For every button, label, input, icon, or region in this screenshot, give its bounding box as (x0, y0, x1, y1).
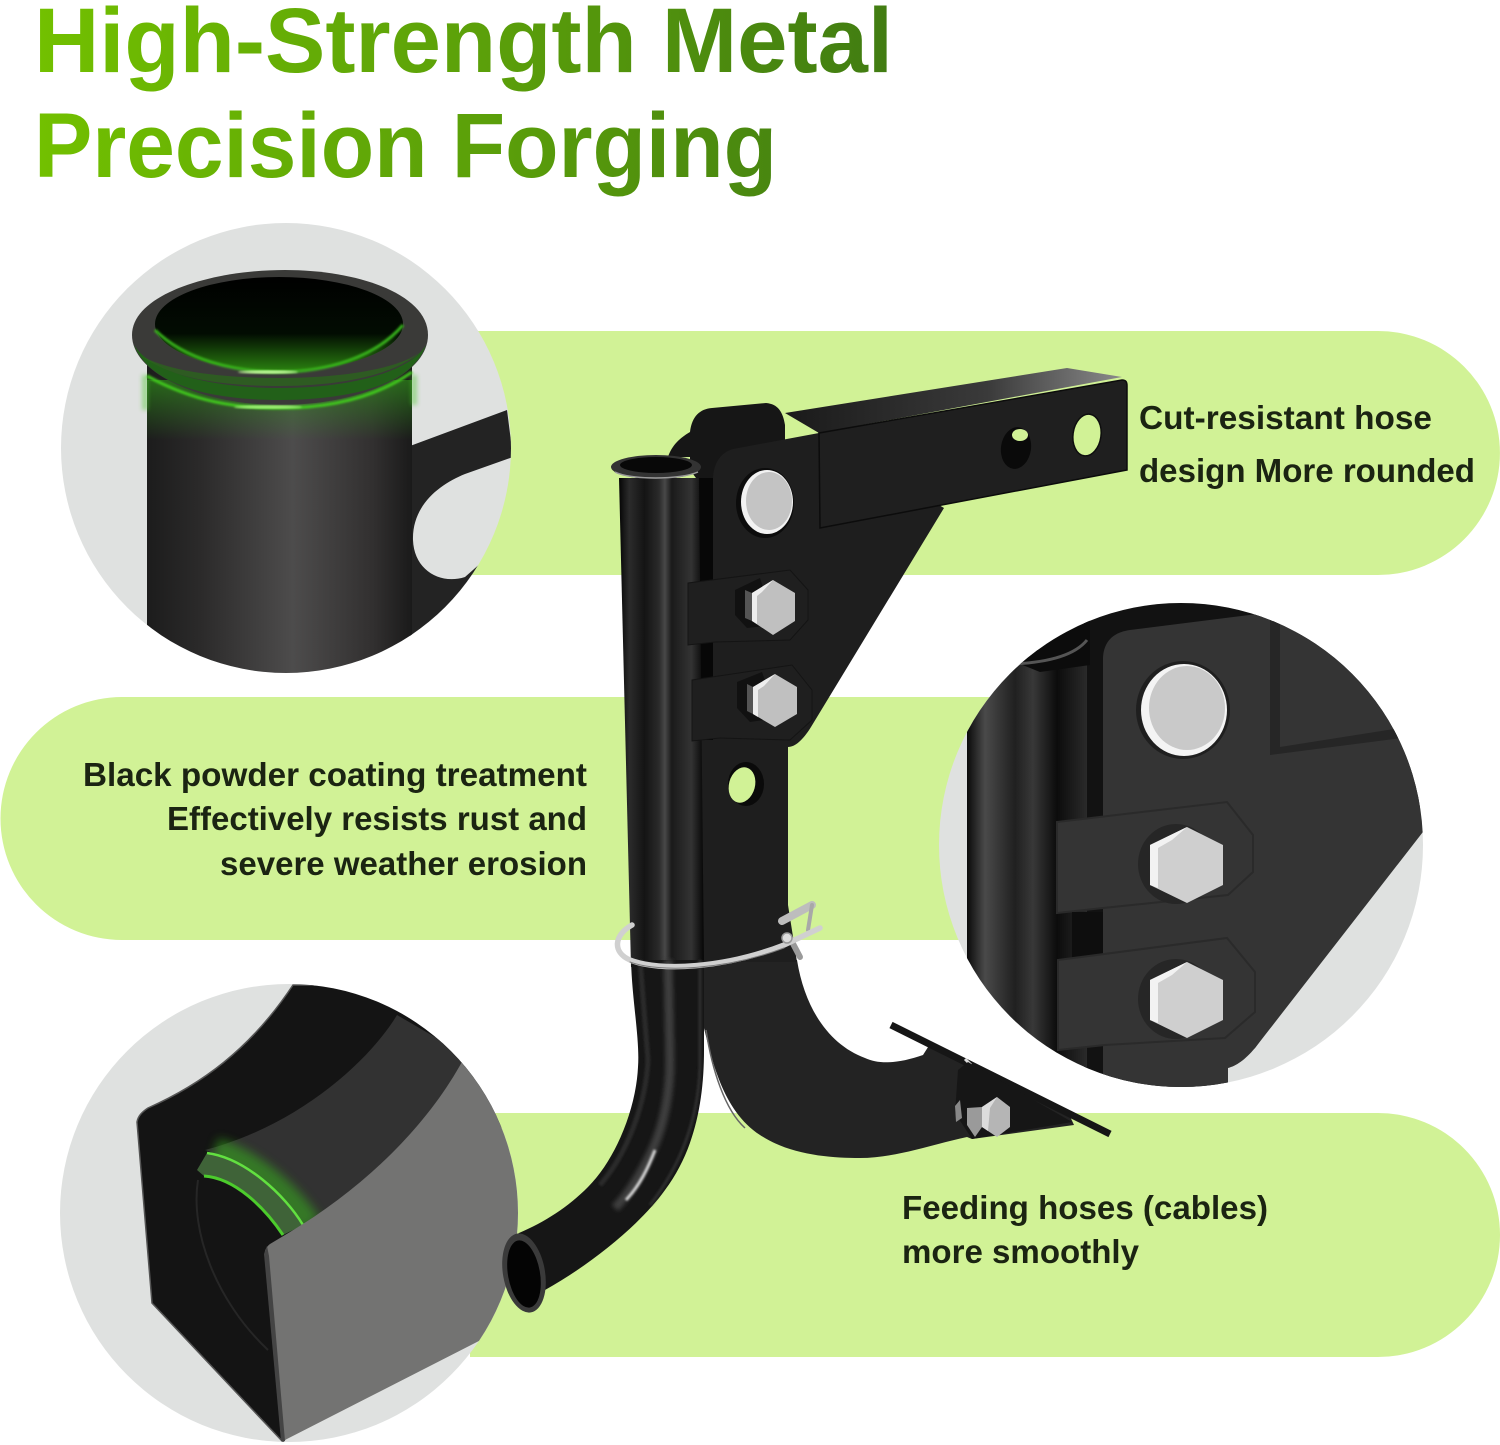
green glow lines (147, 372, 412, 408)
bracket arm behind tube (410, 410, 511, 636)
detail circle: rolled tube rim (61, 223, 520, 680)
tube body (147, 340, 412, 680)
main tube (619, 478, 704, 967)
hook rim light (706, 1030, 745, 1128)
tube rim (611, 455, 701, 479)
tab upper (1057, 802, 1253, 913)
panel: feeding hoses band (470, 1113, 1500, 1357)
tube (967, 650, 1087, 1100)
pivot pin (736, 468, 794, 538)
arm front (819, 380, 1127, 528)
callout: cut-resistant text (1139, 399, 1475, 489)
hollow opening (197, 1180, 268, 1350)
receiver hole near (1070, 412, 1104, 458)
callout: feeding hoses text: more smoothly (902, 1233, 1140, 1270)
green edge glow (215, 1150, 310, 1225)
title: Precision Forging (34, 95, 777, 197)
rim (132, 270, 428, 405)
angled plate on hook (891, 1025, 1110, 1139)
lower tube curve (510, 960, 704, 1290)
callout: powder coating text: Effectively resists rust and (167, 800, 587, 837)
black bracket body (137, 985, 520, 1442)
small hook bolt (955, 1097, 1010, 1137)
plate (1103, 612, 1440, 1090)
strap tab lower (692, 665, 812, 741)
panel: cut-resistant band (470, 331, 1500, 575)
hex bolt upper (735, 578, 795, 635)
callout: powder coating text (83, 756, 587, 882)
tube highlights (600, 960, 700, 1208)
arm edge (1270, 620, 1402, 755)
tube mouth (496, 1230, 552, 1316)
dark backing (1084, 602, 1420, 1090)
mid band (205, 1015, 480, 1228)
lower plate column (700, 740, 797, 962)
pin (1136, 661, 1230, 759)
callout: cut-resistant text: design More rounded (1139, 452, 1475, 489)
detail circle: bolts and plate (939, 600, 1440, 1100)
hex bolt lower (1138, 959, 1223, 1039)
plate hole (725, 762, 764, 806)
receiver hole far (998, 425, 1034, 471)
plate darker backing gap (697, 478, 713, 748)
side glow (145, 375, 414, 410)
callout: powder coating text: severe weather erosion (220, 845, 587, 882)
callout: cut-resistant text: Cut-resistant hose (1139, 399, 1432, 436)
product: hitch mount (496, 368, 1127, 1316)
callout: feeding hoses text: Feeding hoses (cables) (902, 1189, 1268, 1226)
detail circle: curved bracket edge (60, 984, 520, 1442)
title (34, 0, 893, 197)
hook arm (700, 960, 1074, 1158)
arm top face (785, 368, 1122, 433)
gusset plate (704, 433, 944, 925)
panel: powder coating band (0, 697, 1010, 940)
arm rear pivot cap (668, 403, 785, 482)
hitch pin clip (617, 905, 820, 968)
grey front face (265, 1060, 520, 1441)
strap tab upper (688, 570, 808, 645)
hex bolt upper (1138, 824, 1223, 904)
callout: feeding hoses text (902, 1189, 1268, 1270)
tab lower (1058, 938, 1255, 1050)
hex bolt lower (737, 672, 797, 727)
callout: powder coating text: Black powder coating treatment (83, 756, 587, 793)
tube opening (155, 277, 403, 371)
